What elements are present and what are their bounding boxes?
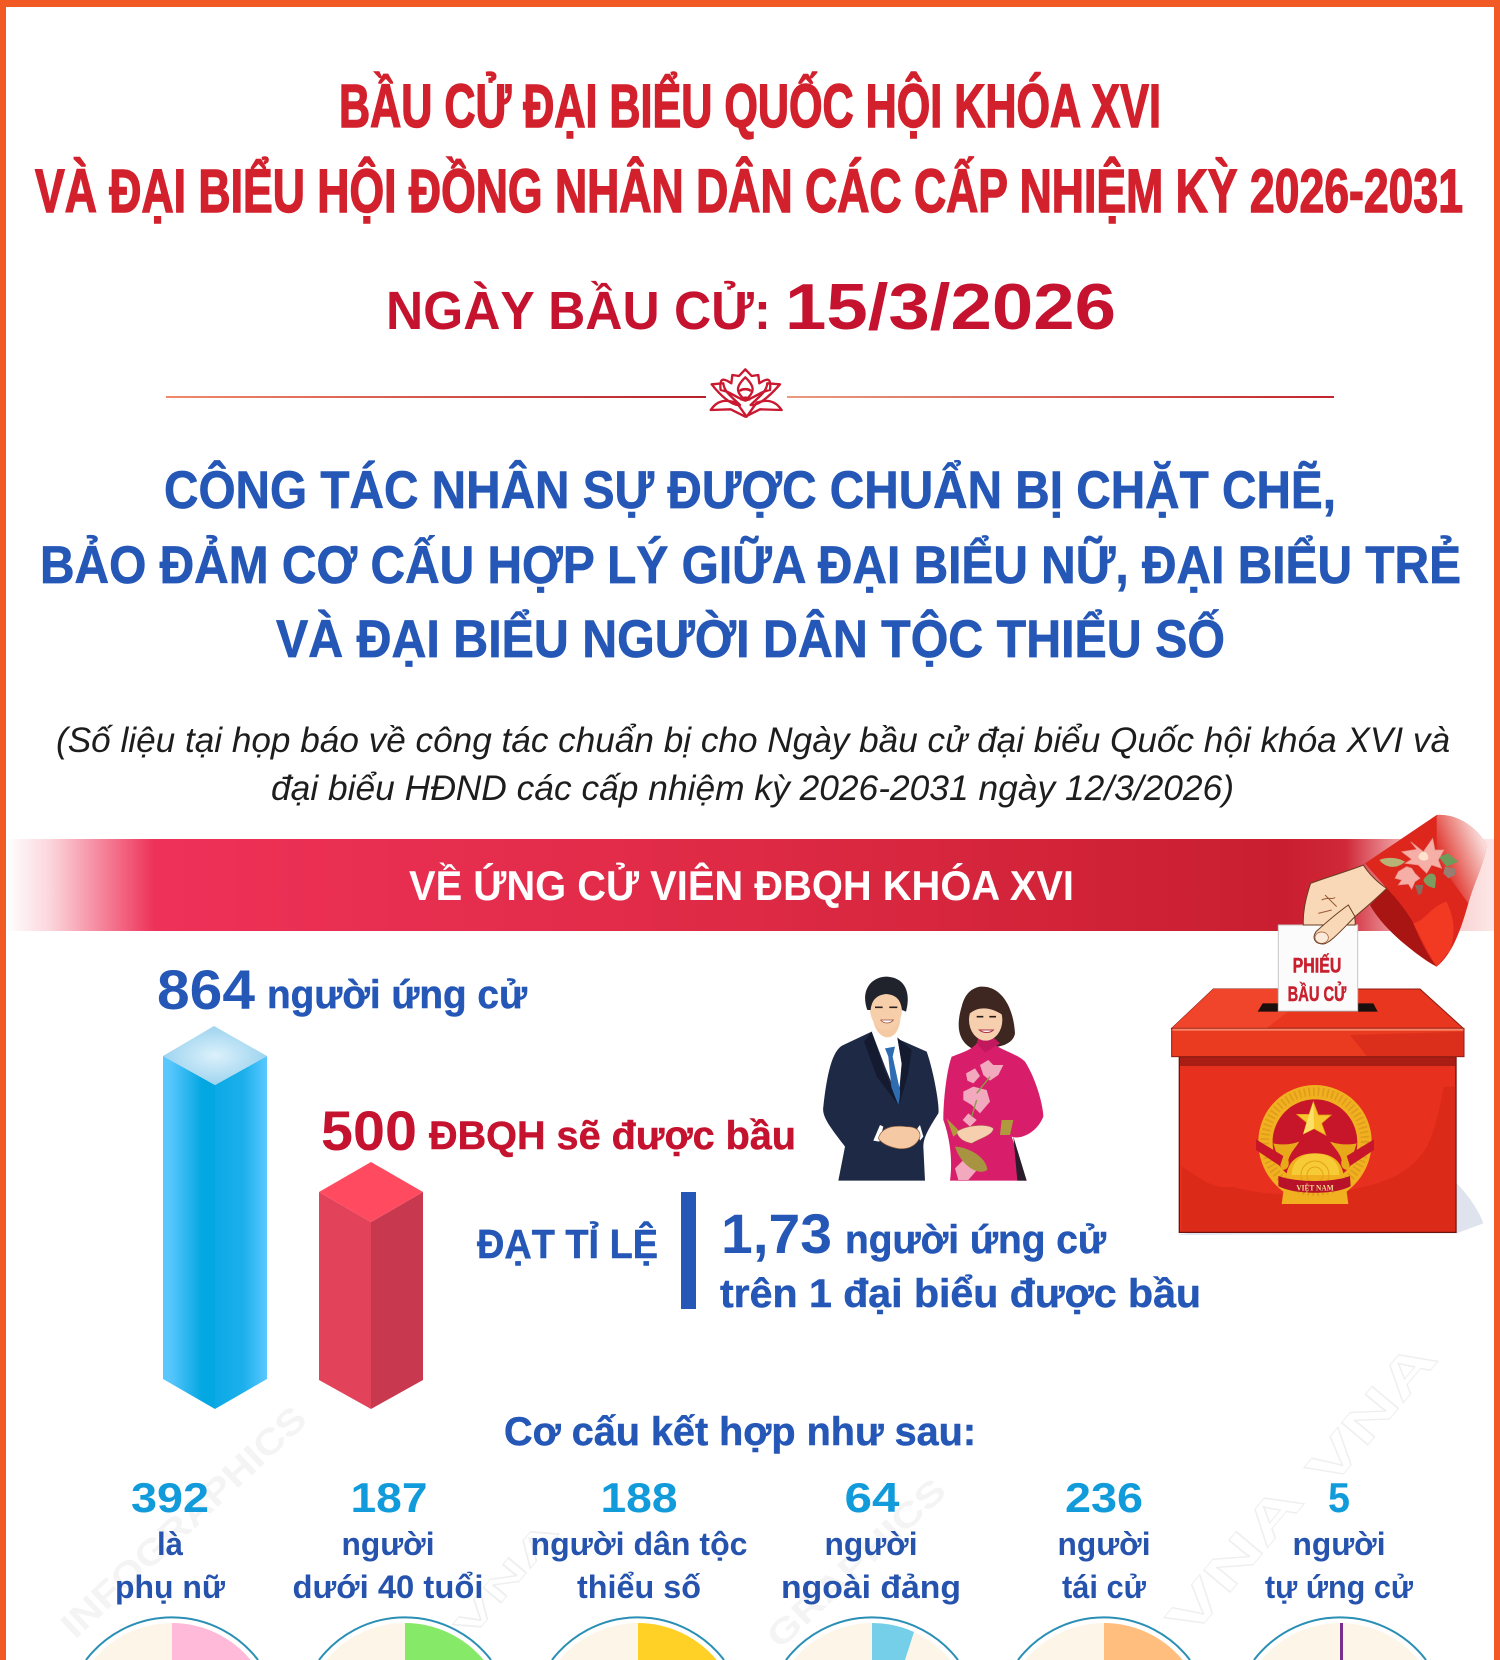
emblem: VIỆT NAM	[1296, 1184, 1334, 1193]
label: 500 deputies: 500	[321, 1099, 417, 1162]
stat: 5 self-nominated	[1265, 1474, 1414, 1605]
stat: 188 ethnic minority: 188	[600, 1474, 678, 1521]
label: 500 deputies	[321, 1099, 796, 1162]
lotus flowers	[1379, 858, 1405, 867]
stat: 187 under 40: 187	[350, 1474, 428, 1521]
stat: 5 self-nominated: tự ứng cử	[1265, 1569, 1414, 1605]
source note: đại biểu HĐND các cấp nhiệm kỳ 2026-2031 ngày 12/3/2026)	[271, 769, 1234, 808]
source note: (Số liệu tại họp báo về công tác chuẩn bị cho Ngày bầu cử đại biểu Quốc hội khóa XVI và	[56, 721, 1450, 760]
ballot box illustration: PHIẾU	[1293, 953, 1341, 978]
stat: 392 women: 392	[131, 1474, 209, 1521]
subheading: structure: Cơ cấu kết hợp như sau:	[504, 1410, 976, 1454]
stat: 236 re-elected	[1058, 1474, 1150, 1605]
box shadow	[1177, 1183, 1483, 1235]
heading: personnel work: CÔNG TÁC NHÂN SỰ ĐƯỢC CHUẨN BỊ CHẶT CHẼ,	[164, 459, 1336, 520]
lid front	[1172, 1028, 1464, 1057]
pie: 188 ethnic minority	[552, 1617, 724, 1660]
emblem	[1256, 1085, 1374, 1204]
lid top	[1172, 989, 1463, 1028]
stat: 64 non-party: 64	[844, 1474, 900, 1521]
people illustration	[823, 977, 1043, 1181]
label: 864 candidates: 864	[157, 958, 255, 1021]
stat: 187 under 40: dưới 40 tuổi	[292, 1569, 484, 1605]
stat: 5 self-nominated: người	[1292, 1526, 1386, 1562]
title	[35, 72, 1463, 225]
watermark: VNA	[447, 1513, 566, 1645]
pie: 5 self-nominated	[1254, 1617, 1426, 1660]
ratio callout: người ứng cử	[845, 1218, 1106, 1262]
heading: personnel work: VÀ ĐẠI BIỂU NGƯỜI DÂN TỘC THIỂU SỐ	[276, 608, 1225, 669]
label: 864 candidates: người ứng cử	[267, 973, 527, 1017]
ballot paper	[1278, 925, 1358, 1011]
ballot box illustration	[1172, 815, 1487, 1235]
election date: 15/3/2026	[785, 270, 1116, 343]
bar: 500 deputies	[319, 1162, 423, 1409]
stat: 187 under 40	[292, 1474, 484, 1605]
pie: 187 under 40	[319, 1617, 491, 1660]
pie: 392 women	[86, 1617, 258, 1660]
stat: 64 non-party: ngoài đảng	[781, 1569, 961, 1605]
section banner	[6, 839, 1494, 931]
woman	[943, 987, 1043, 1181]
stat: 188 ethnic minority: người dân tộc	[530, 1526, 748, 1562]
stat: 187 under 40: người	[342, 1526, 434, 1562]
ballot box illustration: BẦU CỬ	[1288, 981, 1347, 1006]
election date	[386, 270, 1116, 343]
sleeve	[1365, 815, 1487, 967]
stat: 392 women: là	[157, 1526, 183, 1562]
stat: 188 ethnic minority: thiểu số	[577, 1569, 701, 1605]
stat: 236 re-elected: 236	[1065, 1474, 1143, 1521]
label: 864 candidates	[157, 958, 527, 1021]
ratio callout: trên 1 đại biểu được bầu	[720, 1272, 1201, 1316]
ratio callout: 1,73	[721, 1202, 832, 1265]
pie: 236 re-elected	[1018, 1617, 1190, 1660]
watermark	[52, 1331, 1448, 1656]
ratio callout	[477, 1192, 1201, 1316]
watermark: VNA	[1296, 1331, 1448, 1497]
stat: 188 ethnic minority	[530, 1474, 748, 1605]
stat: 392 women	[115, 1474, 226, 1605]
source note	[56, 721, 1450, 808]
hand	[1303, 865, 1387, 925]
icon: lotus	[711, 369, 782, 417]
watermark: INFOGRAPHICS	[52, 1398, 314, 1646]
slot	[1258, 1003, 1378, 1012]
stat: 64 non-party	[781, 1474, 961, 1605]
election date: NGÀY BẦU CỬ:	[386, 281, 771, 341]
watermark: GRAPHICS	[760, 1471, 954, 1656]
ratio callout: ĐẠT TỈ LỆ	[477, 1221, 658, 1267]
box body	[1179, 1057, 1456, 1232]
title: BẦU CỬ ĐẠI BIỂU QUỐC HỘI KHÓA XVI	[339, 72, 1161, 140]
man	[823, 977, 939, 1181]
stat: 392 women: phụ nữ	[115, 1569, 226, 1605]
heading: personnel work	[40, 459, 1461, 669]
label: 500 deputies: ĐBQH sẽ được bầu	[429, 1114, 796, 1158]
stat: 236 re-elected: tái cử	[1062, 1569, 1147, 1605]
divider with lotus	[166, 369, 1334, 417]
watermark: VNA	[1156, 1473, 1314, 1647]
sleeve and hand	[1303, 815, 1487, 967]
pie: 64 non-party	[786, 1617, 958, 1660]
section banner: VỀ ỨNG CỬ VIÊN ĐBQH KHÓA XVI	[409, 861, 1074, 909]
stat: 64 non-party: người	[824, 1526, 918, 1562]
stat: 5 self-nominated: 5	[1328, 1474, 1350, 1521]
bar: 864 candidates	[163, 1026, 267, 1409]
stat: 236 re-elected: người	[1058, 1526, 1150, 1562]
